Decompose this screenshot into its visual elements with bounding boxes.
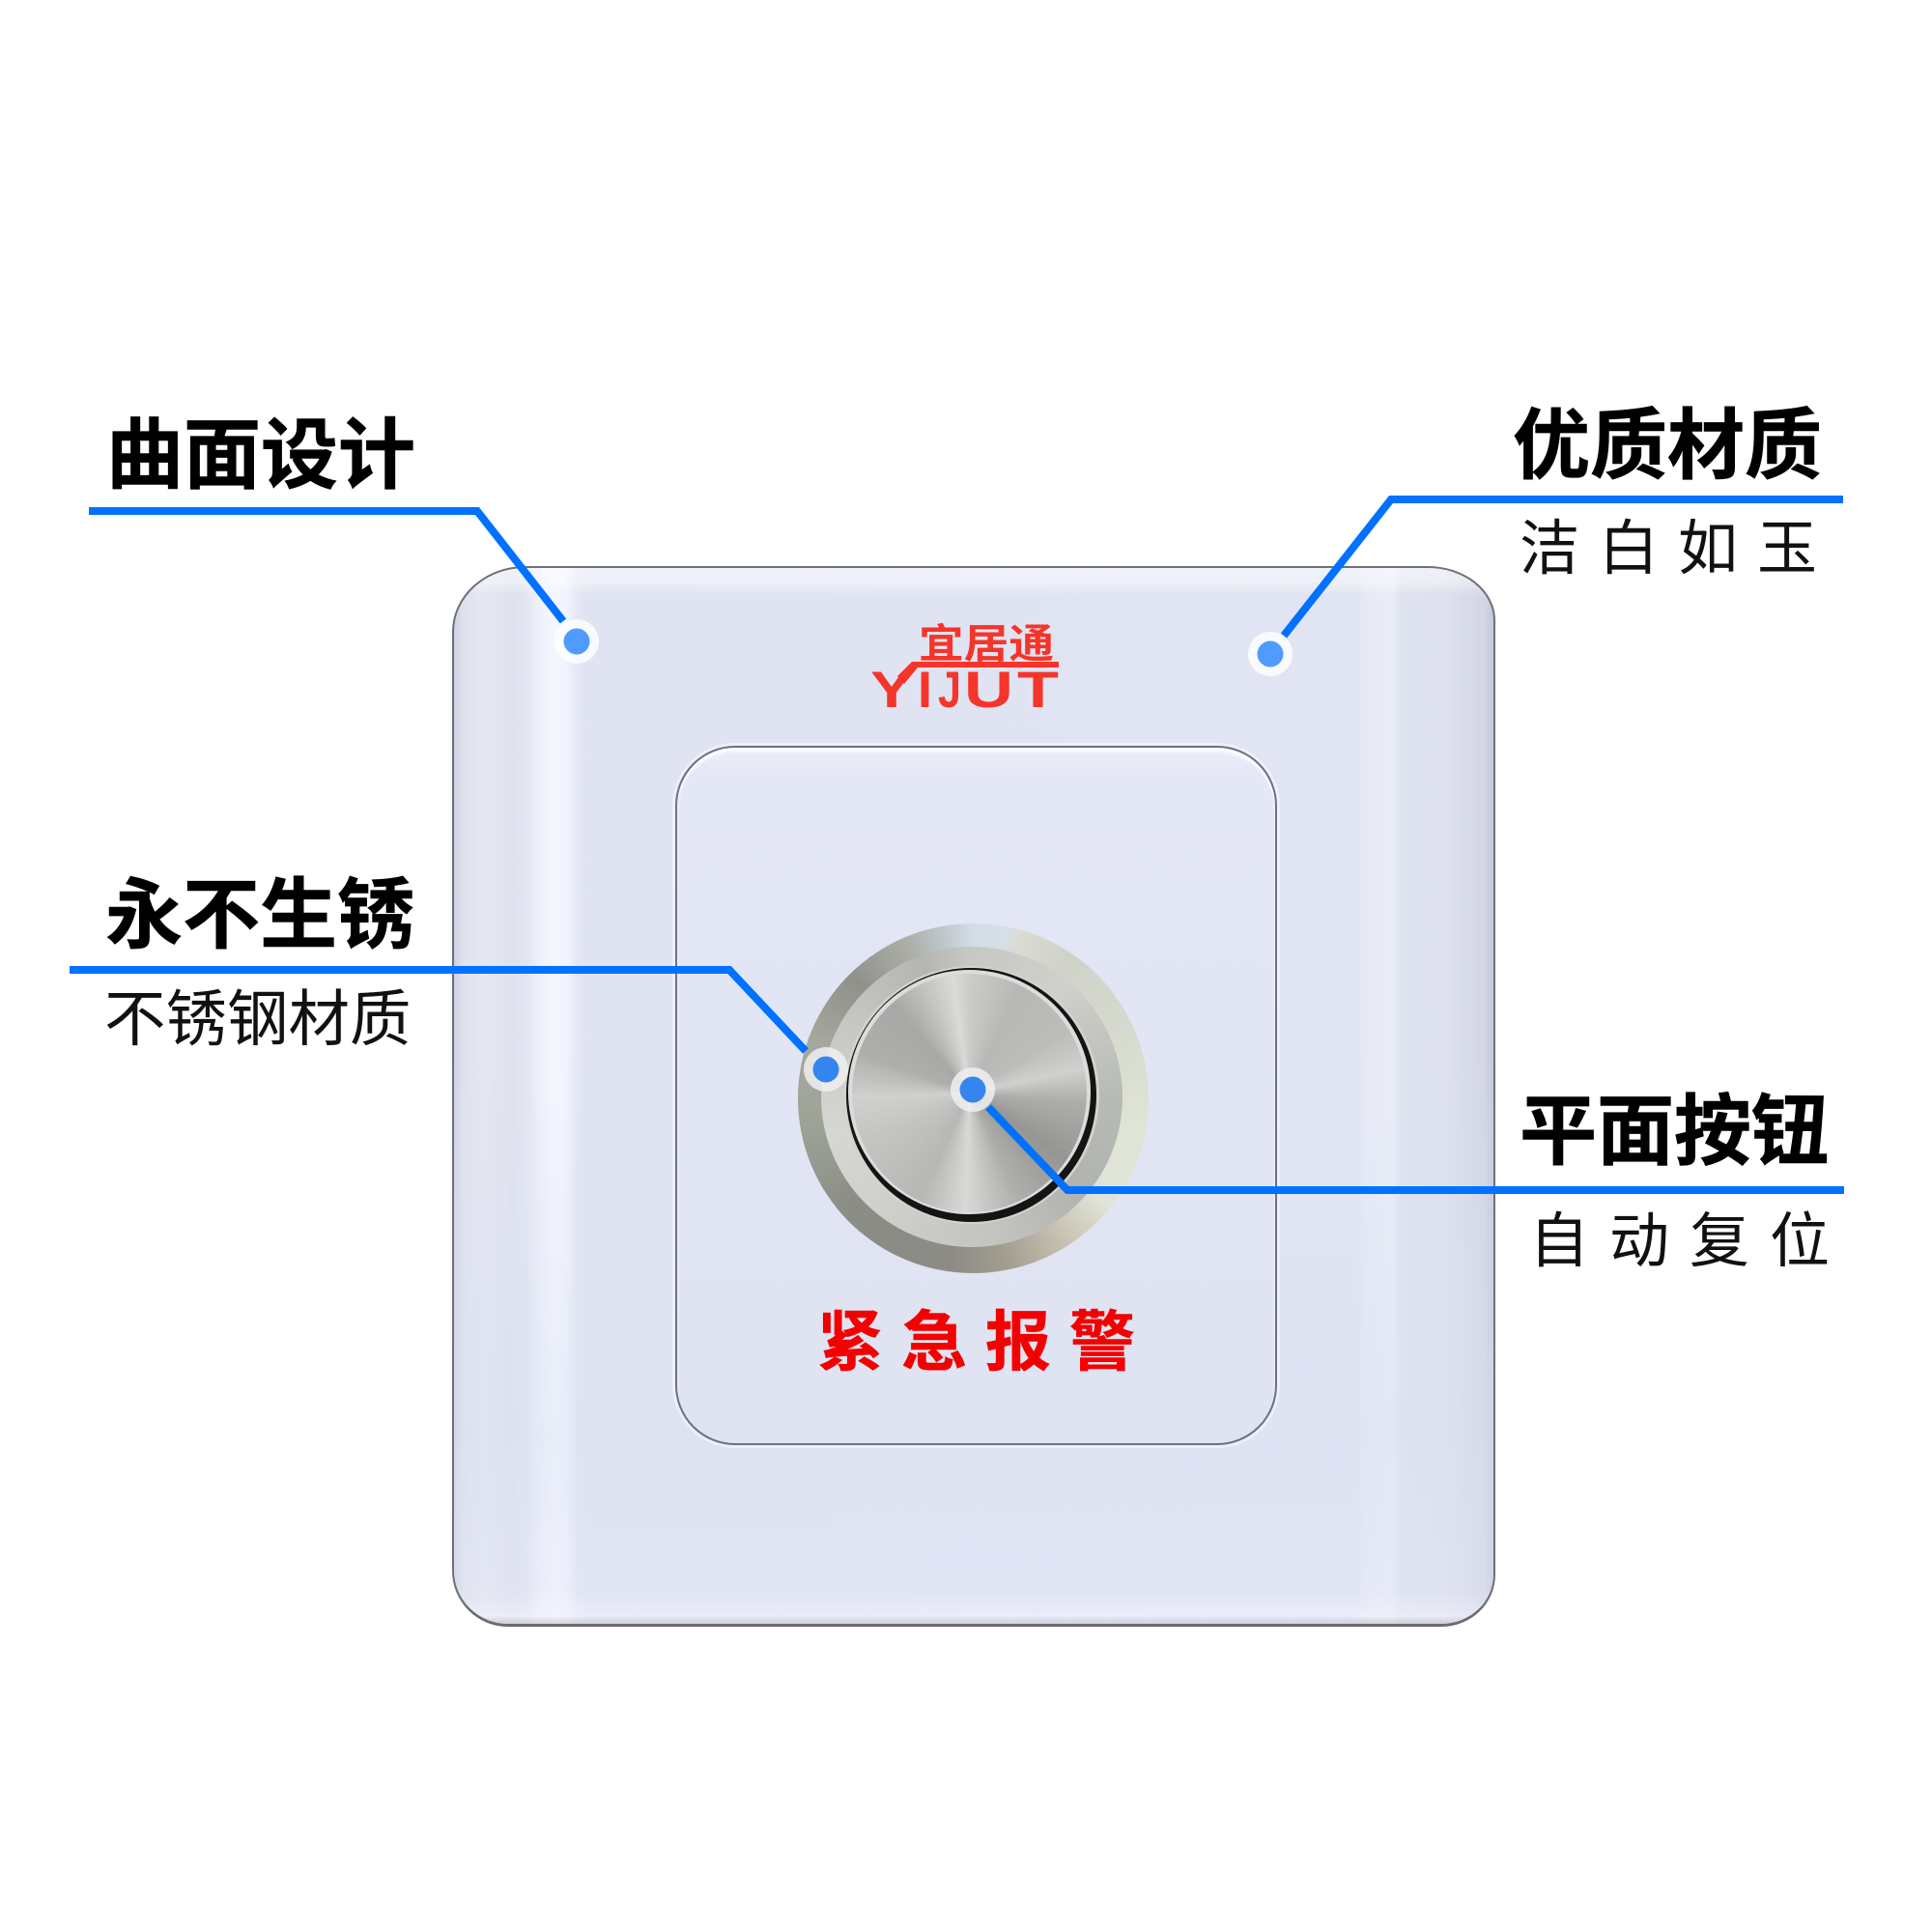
label: 紧急报警: 紧急报警 [817, 1306, 1153, 1379]
heading: 永不生锈: 永不生锈 [105, 872, 414, 958]
inner panel [675, 746, 1277, 1445]
heading: 平面按钮: 平面按钮 [1520, 1089, 1829, 1175]
logo: YIJUT [870, 621, 1059, 715]
metal push button [798, 923, 1149, 1273]
subtext: 洁白如玉: 洁白如玉 [1520, 516, 1836, 582]
subtext: 不锈钢材质: 不锈钢材质 [104, 986, 412, 1054]
logo: YIJUT: 宜居通 [919, 621, 1054, 667]
heading: 曲面设计: 曲面设计 [106, 412, 415, 498]
subtext: 自动复位: 自动复位 [1529, 1208, 1850, 1275]
switch plate [452, 566, 1495, 1627]
heading: 优质材质: 优质材质 [1513, 403, 1822, 489]
